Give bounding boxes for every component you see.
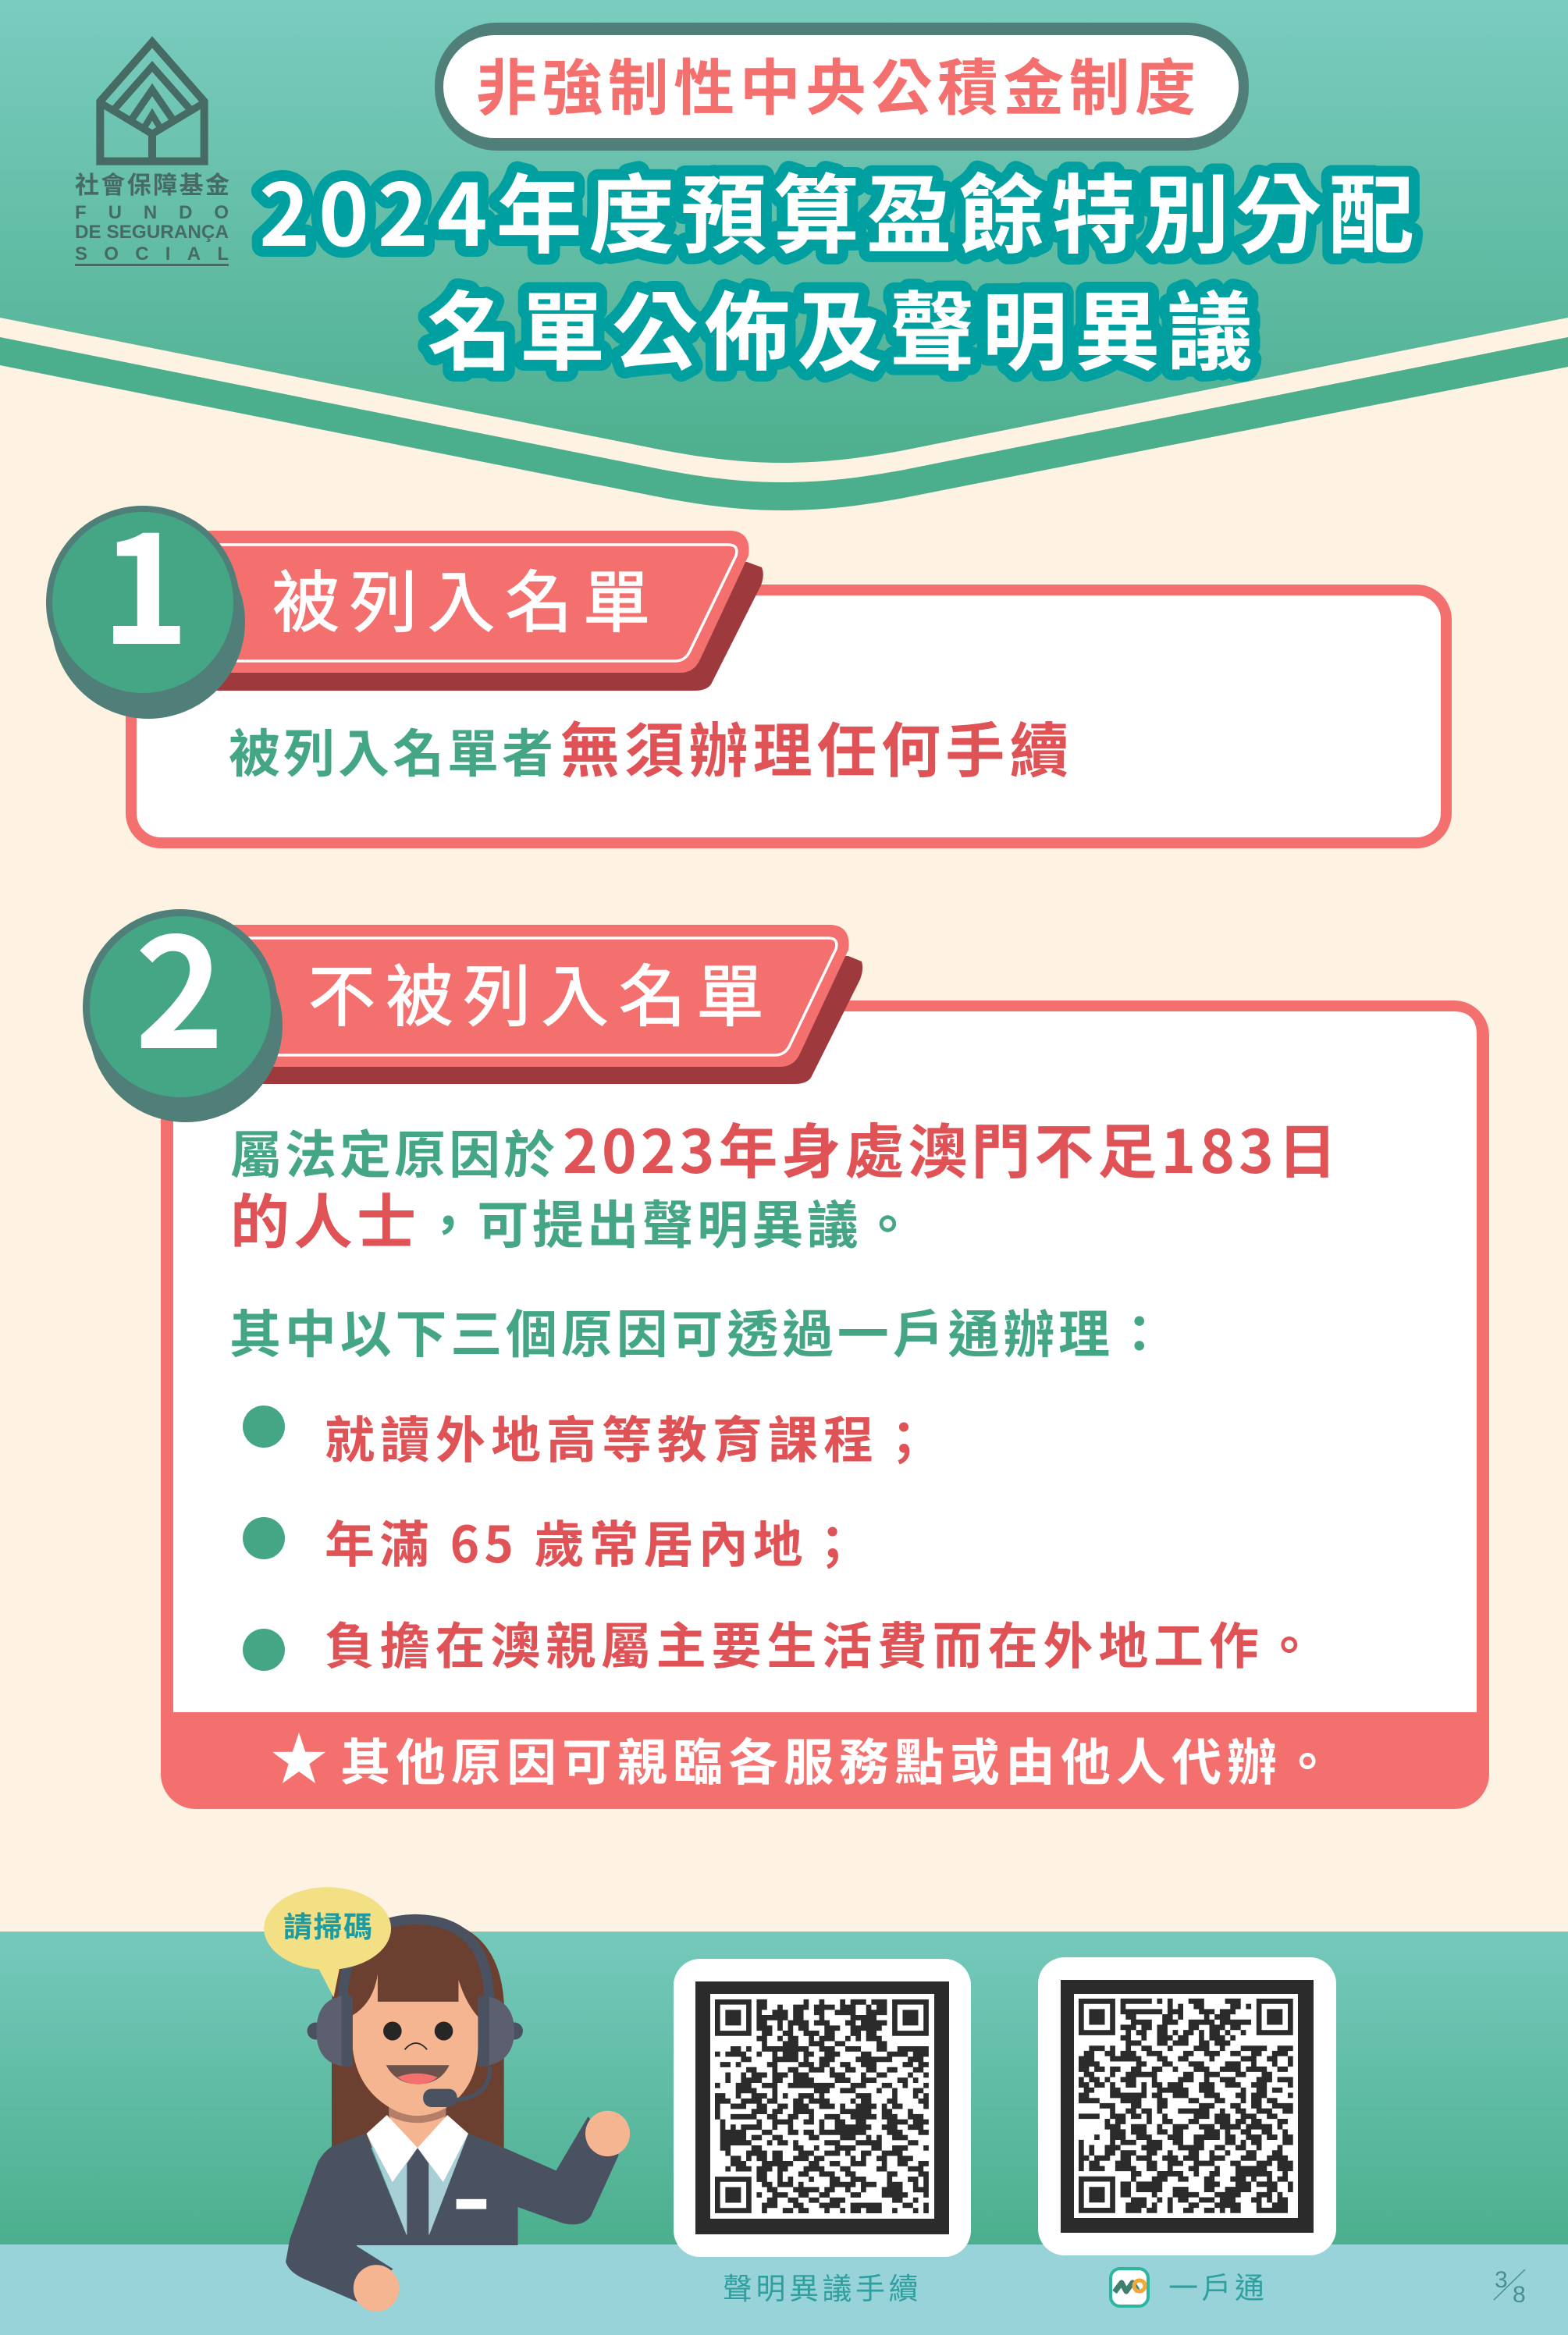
panel 1 text: 被列入名單者無須辦理任何手續 [229,703,1074,789]
footer bands [0,1932,1568,2335]
icon: customer service agent [264,1887,630,2312]
bullet 1: 就讀外地高等教育課程； [325,1401,934,1473]
logo: Fundo de Segurança Social [75,42,231,266]
main title [259,146,1421,388]
panel 1 box [131,590,1446,843]
caption: QR 2: 一戶通 [1168,2264,1268,2307]
number badge 1 [46,471,245,719]
header wave background [0,0,1568,510]
page number: 3 [1495,2267,1508,2293]
QR code 2 [1038,1957,1336,2255]
ribbon 1 [180,531,763,691]
number badge 1: 1 [101,471,190,688]
top pill heading [435,23,1249,151]
page number: 8 [1513,2282,1526,2308]
panel 1: on the list [46,471,1446,843]
logo: Fundo de Segurança Social: SOCIAL [75,243,229,265]
number badge 2 [83,873,283,1122]
ribbon 2: 不被列入名單 [308,942,774,1040]
subheading: 其中以下三個原因可透過一戶通辦理： [229,1293,1169,1368]
ribbon 2 [219,925,862,1084]
icon: one account app [1111,2269,1148,2306]
top pill heading: 非強制性中央公積金制度 [476,40,1200,127]
logo: Fundo de Segurança Social: FUNDO [75,202,229,223]
ribbon 1: 被列入名單 [272,548,660,645]
main title: 2024年度預算盈餘特別分配 [259,146,1421,271]
QR code 1 [674,1959,971,2257]
panel 2 box [161,1000,1489,1809]
panel 2: not on the list [83,873,1489,1809]
page number [1494,2267,1526,2308]
intro text line 2: 的人士，可提出聲明異議。 [230,1175,917,1260]
bullet 2: 年滿 65 歲常居內地； [325,1505,862,1577]
number badge 2: 2 [134,873,225,1093]
logo: Fundo de Segurança Social: DE SEGURANÇA [75,222,229,243]
intro text line 1: 屬法定原因於2023年身處澳門不足183日 [230,1104,1341,1190]
footer note band: 其他原因可親臨各服務點或由他人代辦。 [340,1723,1338,1795]
speech bubble text: 請掃碼 [283,1903,373,1946]
logo: Fundo de Segurança Social: 社會保障基金 [75,165,231,201]
main title: 名單公佈及聲明異議 [427,263,1260,388]
caption: QR 1: 聲明異議手續 [723,2265,922,2308]
bullet 3: 負擔在澳親屬主要生活費而在外地工作。 [325,1607,1319,1679]
